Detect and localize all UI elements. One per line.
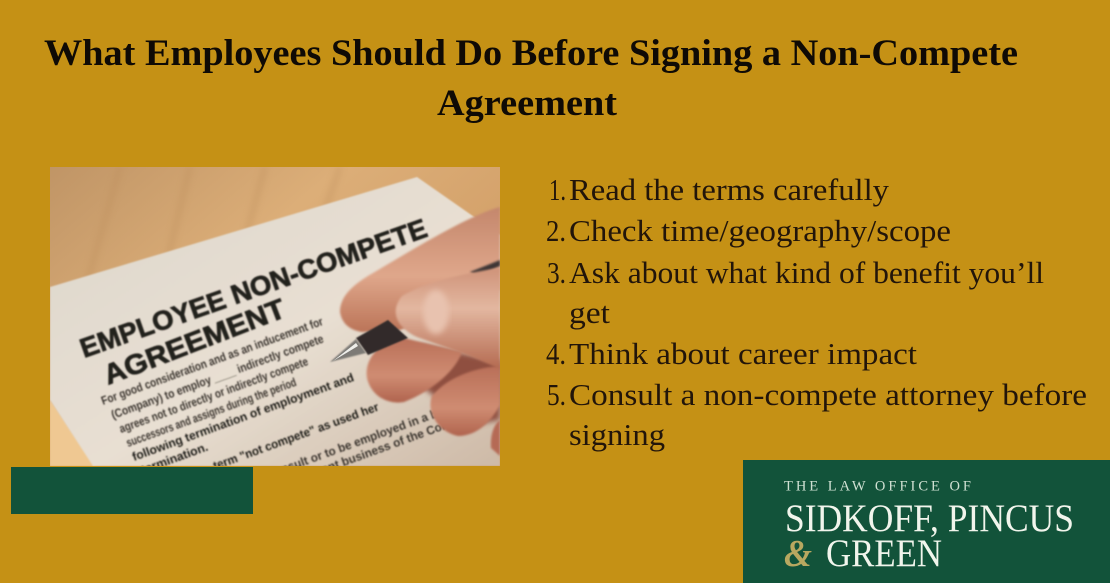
logo: The Law Office of Sidkoff, Pincus & Green	[743, 460, 1110, 583]
item 3: Ask about what kind of benefit you’ll	[569, 255, 1044, 290]
item 5	[547, 377, 1087, 452]
item 5: signing	[569, 417, 665, 452]
item 1: Read the terms carefully	[569, 172, 890, 207]
item 4: 4.	[546, 336, 566, 371]
item 2: 2.	[546, 213, 566, 248]
numbered list	[546, 172, 1087, 452]
document body text	[100, 318, 445, 466]
document body text: For good consideration and as an inducement for	[99, 314, 325, 408]
logo: The Law Office of Sidkoff, Pincus & Green: GREEN	[826, 532, 942, 575]
item 5: 5.	[547, 377, 566, 412]
document heading: EMPLOYEE NON-COMPETE	[76, 213, 431, 364]
document body text: termination.	[139, 440, 210, 477]
item 3: 3.	[547, 255, 566, 290]
document body text: successors and assigns during the period	[124, 375, 298, 450]
document body text: following termination of employment and	[130, 370, 356, 464]
hand and pen	[330, 207, 500, 456]
logo: The Law Office of Sidkoff, Pincus & Green: THE LAW OFFICE OF	[784, 478, 971, 494]
item 3	[547, 255, 1044, 330]
item 3: get	[569, 295, 610, 330]
paper sheet	[50, 177, 500, 466]
item 1: 1.	[549, 172, 566, 207]
wood desk	[50, 167, 500, 466]
document body text: consult or to be employed in a busine	[266, 396, 469, 481]
item 2: Check time/geography/scope	[569, 213, 951, 248]
title: Agreement	[437, 83, 618, 124]
item 4: Think about career impact	[569, 336, 917, 371]
title	[44, 33, 1018, 124]
title: What Employees Should Do Before Signing a Non-Compete	[44, 33, 1018, 74]
item 5: Consult a non-compete attorney before	[569, 377, 1087, 412]
logo: The Law Office of Sidkoff, Pincus & Green: SIDKOFF, PINCUS	[785, 497, 1074, 540]
logo: The Law Office of Sidkoff, Pincus & Green: &	[784, 533, 812, 575]
photo: hand signing employee non-compete agreement	[50, 167, 500, 485]
document heading: AGREEMENT	[99, 293, 289, 391]
document body text: present business of the Company	[296, 407, 480, 485]
green accent bar	[11, 467, 253, 514]
document body text: agrees not to directly or indirectly compete	[117, 354, 310, 436]
document body text: term "not compete" as used her	[211, 400, 381, 473]
document body text: (Company) to employ ____ indirectly compete	[109, 332, 326, 422]
